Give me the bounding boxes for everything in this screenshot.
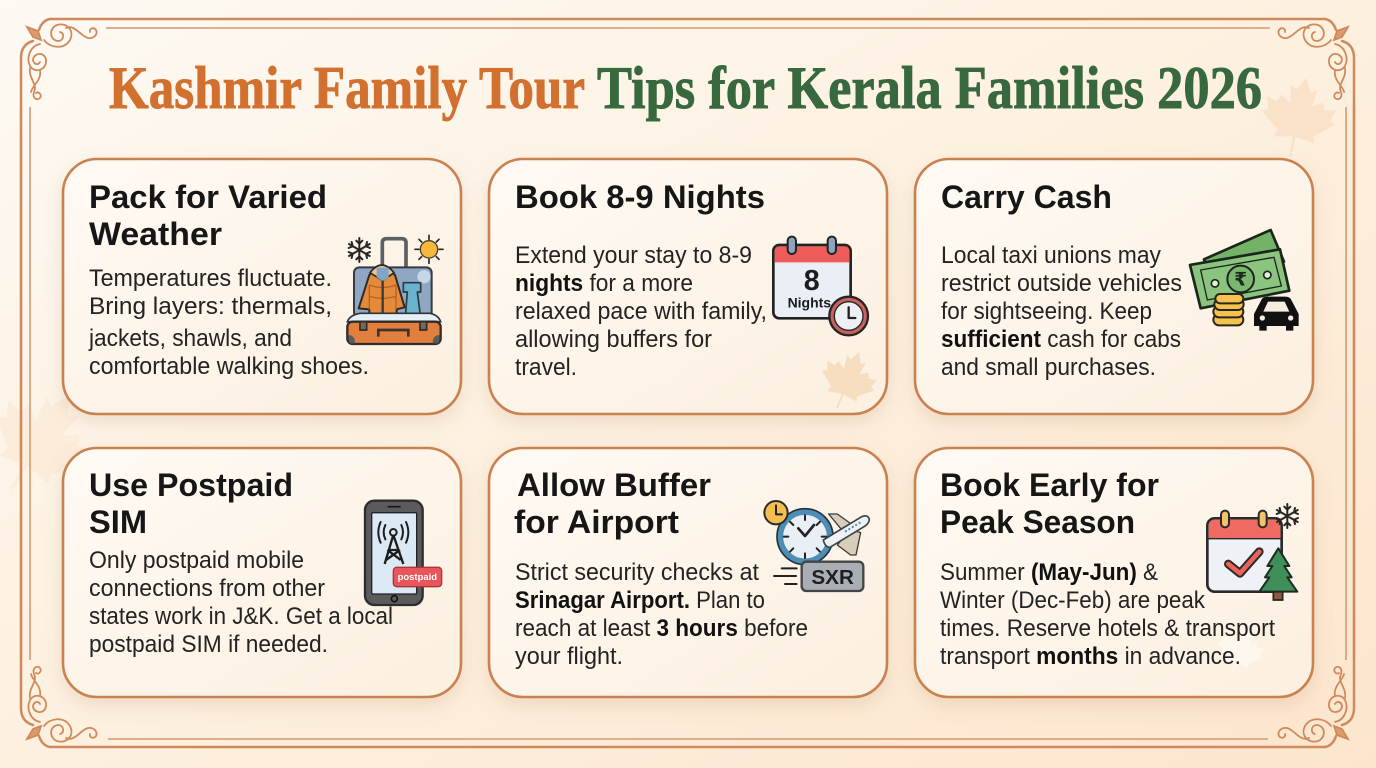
body text: postpaid SIM if needed. — [89, 631, 328, 658]
body text: travel. — [515, 354, 577, 381]
heading: SIM — [89, 504, 147, 540]
body text — [515, 559, 808, 670]
body text: Extend your stay to 8-9 — [515, 242, 752, 269]
body text: Temperatures fluctuate. — [89, 265, 332, 292]
body text: reach at least 3 hours before — [515, 615, 808, 642]
body text: Local taxi unions may — [941, 242, 1162, 269]
body text: jackets, shawls, and — [88, 325, 292, 352]
body text: and small purchases. — [941, 354, 1156, 381]
body text: sufficient cash for cabs — [941, 326, 1181, 353]
icon: suitcase with jacket, snowflake and sun — [347, 235, 443, 344]
body text — [515, 242, 767, 381]
heading: Carry Cash — [941, 179, 1112, 215]
heading: Book 8-9 Nights — [515, 179, 765, 215]
body text: Winter (Dec-Feb) are peak — [940, 587, 1206, 614]
panel: allow buffer for airport — [489, 448, 887, 697]
body text: transport months in advance. — [940, 643, 1241, 670]
body text: nights for a more — [515, 270, 693, 297]
panel: use postpaid sim — [63, 448, 461, 697]
heading — [514, 467, 711, 540]
panel: carry cash — [915, 159, 1313, 414]
heading: for Airport — [514, 504, 679, 540]
panel: pack for varied weather — [63, 159, 461, 414]
body text: relaxed pace with family, — [515, 298, 767, 325]
icon: clock, plane and SXR tag: SXR — [811, 566, 854, 589]
decorative maple leaf: left — [0, 369, 113, 516]
body text: Srinagar Airport. Plan to — [515, 587, 765, 614]
body text — [940, 559, 1275, 670]
heading: Allow Buffer — [517, 467, 711, 503]
body text — [88, 265, 369, 380]
title: Tips for Kerala Families 2026 — [597, 55, 1262, 121]
icon: money, coins and taxi: ₹ — [1234, 270, 1247, 291]
body text — [941, 242, 1182, 381]
body text: connections from other — [89, 575, 325, 602]
body text: your flight. — [515, 643, 623, 670]
icon: clock, plane and SXR tag — [764, 501, 869, 591]
body text: Bring layers: thermals, — [89, 293, 332, 320]
icon: phone with signal tower and postpaid tag — [365, 501, 442, 605]
icon: money, coins and taxi — [1190, 230, 1299, 331]
heading — [89, 179, 327, 252]
heading — [940, 467, 1159, 540]
heading: Weather — [89, 216, 222, 252]
body text: times. Reserve hotels & transport — [940, 615, 1275, 642]
decorative maple leaf — [811, 342, 885, 418]
icon: calendar 8 nights with clock: 8 — [804, 265, 820, 297]
heading: Book Early for — [940, 467, 1159, 503]
panel: book 8-9 nights — [489, 159, 887, 418]
body text: comfortable walking shoes. — [89, 353, 369, 380]
title — [109, 55, 1262, 121]
title: Kashmir Family Tour — [109, 55, 585, 121]
icon: calendar 8 nights with clock: Nights — [788, 295, 831, 311]
icon: calendar 8 nights with clock — [773, 237, 868, 335]
body text: Strict security checks at — [515, 559, 759, 586]
heading — [89, 467, 293, 540]
faint maple leaf — [1210, 619, 1271, 682]
body text: restrict outside vehicles — [941, 270, 1182, 297]
body text: Summer (May-Jun) & — [940, 559, 1158, 586]
body text: for sightseeing. Keep — [941, 298, 1152, 325]
decorative maple leaf: top right — [1254, 70, 1343, 164]
body text: Only postpaid mobile — [89, 547, 304, 574]
panel: book early for peak season — [915, 448, 1313, 697]
body text: states work in J&K. Get a local — [89, 603, 393, 630]
icon: calendar with check, pine tree and snowflake — [1207, 504, 1298, 600]
icon: phone with signal tower and postpaid tag: postpaid — [398, 572, 437, 582]
body text: allowing buffers for — [515, 326, 712, 353]
body text — [89, 547, 393, 658]
heading: Use Postpaid — [89, 467, 293, 503]
heading: Pack for Varied — [89, 179, 327, 215]
heading: Peak Season — [940, 504, 1135, 540]
